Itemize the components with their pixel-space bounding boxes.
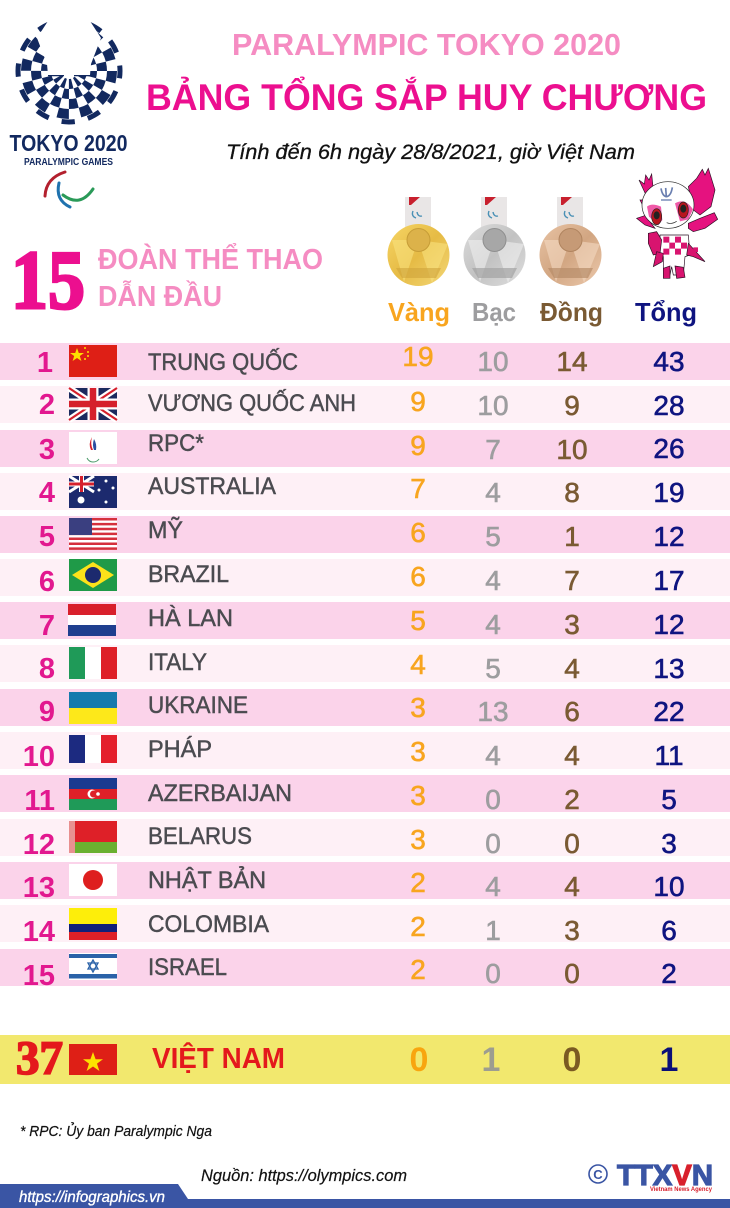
row 4: Australia: 19 bbox=[653, 477, 685, 508]
row 10: Pháp: 3 bbox=[410, 736, 426, 767]
row 13: Nhật Bản bbox=[0, 862, 730, 904]
logo: Tokyo 2020 Paralympic Games bbox=[10, 20, 128, 207]
column headers bbox=[388, 297, 697, 327]
flag: France bbox=[69, 735, 117, 763]
row 3: RPC: 7 bbox=[485, 434, 501, 465]
row 4: Australia: AUSTRALIA bbox=[148, 473, 276, 500]
flag: Brazil bbox=[69, 559, 117, 591]
row 7: Hà Lan: 7 bbox=[39, 610, 55, 642]
subtitle: date note: Tính đến 6h ngày 28/8/2021, giờ Việt Nam bbox=[226, 141, 635, 164]
row 2: Vương quốc Anh: 9 bbox=[564, 390, 580, 421]
header: Vàng: Vàng bbox=[388, 297, 450, 327]
row 9: Ukraine: 9 bbox=[39, 696, 55, 728]
row 8: Italy: 13 bbox=[653, 653, 685, 684]
header: Tổng: Tổng bbox=[635, 297, 697, 327]
row 13: Nhật Bản: 4 bbox=[564, 871, 580, 902]
callout: 15 đoàn thể thao dẫn đầu bbox=[11, 234, 323, 327]
row 10: Pháp: 10 bbox=[23, 741, 55, 773]
row 2: Vương quốc Anh: 10 bbox=[477, 390, 509, 421]
row 6: Brazil: BRAZIL bbox=[148, 561, 229, 588]
flag: United States bbox=[69, 518, 117, 550]
footer bar bbox=[0, 1184, 730, 1208]
row 3: RPC: 9 bbox=[410, 430, 426, 461]
row 6: Brazil: 4 bbox=[485, 565, 501, 596]
values: medals of Vietnam: 0 bbox=[410, 1041, 428, 1079]
flag: Japan bbox=[69, 864, 117, 896]
logo: TTXVN: C bbox=[593, 1167, 603, 1182]
row 5: Mỹ: 1 bbox=[564, 521, 580, 552]
row 1: Trung Quốc: 19 bbox=[402, 341, 434, 372]
row 12: Belarus: BELARUS bbox=[148, 823, 252, 850]
footnote: RPC: * RPC: Ủy ban Paralympic Nga bbox=[20, 1122, 212, 1140]
row 6: Brazil: 7 bbox=[564, 565, 580, 596]
source: Nguồn: https://olympics.com bbox=[201, 1167, 407, 1185]
row 2: Vương quốc Anh: 9 bbox=[410, 386, 426, 417]
row 3: RPC bbox=[0, 430, 730, 467]
row 2: Vương quốc Anh: 28 bbox=[653, 390, 685, 421]
row 6: Brazil: 17 bbox=[653, 565, 685, 596]
row 9: Ukraine: UKRAINE bbox=[148, 692, 248, 719]
row 12: Belarus bbox=[0, 819, 730, 861]
row 7: Hà Lan: HÀ LAN bbox=[148, 605, 233, 632]
row 9: Ukraine: 13 bbox=[477, 696, 509, 727]
row 8: Italy: 4 bbox=[410, 649, 426, 680]
row 11: Azerbaijan bbox=[0, 775, 730, 817]
row 11: Azerbaijan: 3 bbox=[410, 780, 426, 811]
row 4: Australia: 8 bbox=[564, 477, 580, 508]
header: Bạc: Bạc bbox=[472, 297, 516, 327]
row 14: Colombia: 3 bbox=[564, 915, 580, 946]
footer link: https://infographics.vn bbox=[19, 1189, 165, 1206]
flag: Israel bbox=[69, 953, 117, 980]
row 6: Brazil: 6 bbox=[39, 566, 55, 598]
values: medals of Vietnam: 1 bbox=[660, 1041, 678, 1079]
row 13: Nhật Bản: NHẬT BẢN bbox=[148, 865, 266, 894]
row 5: Mỹ: 12 bbox=[653, 521, 685, 552]
callout text line 2: DẪN ĐẦU bbox=[98, 279, 222, 313]
flag: Colombia bbox=[69, 908, 117, 940]
emblem: checkered wreath bbox=[18, 20, 120, 122]
row 7: Hà Lan bbox=[0, 602, 730, 642]
icon: silver medal bbox=[464, 197, 526, 286]
row 1: Trung Quốc: 1 bbox=[37, 347, 53, 379]
row 14: Colombia: COLOMBIA bbox=[148, 911, 269, 938]
flag: China bbox=[69, 345, 117, 377]
row 7: Hà Lan: 3 bbox=[564, 609, 580, 640]
row 4: Australia: 4 bbox=[485, 477, 501, 508]
flag: Australia bbox=[69, 476, 117, 508]
row 8: Italy: ITALY bbox=[148, 649, 207, 676]
row 10: Pháp bbox=[0, 732, 730, 773]
table: medal ranking bbox=[0, 341, 730, 992]
row 15: Israel: 2 bbox=[410, 954, 426, 985]
row 3: RPC: 3 bbox=[39, 434, 55, 466]
row 13: Nhật Bản: 10 bbox=[653, 871, 685, 902]
row 4: Australia: 7 bbox=[410, 473, 426, 504]
row 12: Belarus: 3 bbox=[410, 824, 426, 855]
row 1: Trung Quốc: 10 bbox=[477, 346, 509, 377]
values: medals of Vietnam bbox=[410, 1041, 678, 1079]
flag: Azerbaijan bbox=[69, 778, 117, 810]
row 6: Brazil: 6 bbox=[410, 561, 426, 592]
wordmark: TTXVN bbox=[617, 1160, 713, 1192]
icon: gold medal bbox=[388, 197, 450, 286]
row 3: RPC: RPC* bbox=[148, 430, 204, 457]
row 15: Israel: ISRAEL bbox=[148, 954, 227, 981]
row 1: Trung Quốc: TRUNG QUỐC bbox=[148, 348, 298, 376]
values: medals of Vietnam: 1 bbox=[482, 1041, 500, 1079]
flag: RPC emblem bbox=[69, 432, 117, 464]
row 15: Israel: 2 bbox=[661, 958, 677, 989]
row 11: Azerbaijan: 2 bbox=[564, 784, 580, 815]
header: Đồng: Đồng bbox=[540, 297, 603, 327]
row 5: Mỹ: 5 bbox=[39, 521, 55, 553]
row 9: Ukraine: 22 bbox=[653, 696, 685, 727]
row 2: Vương quốc Anh: 2 bbox=[39, 389, 55, 421]
row 3: RPC: 10 bbox=[556, 434, 588, 465]
row 13: Nhật Bản: 13 bbox=[23, 872, 55, 904]
row 8: Italy: 4 bbox=[564, 653, 580, 684]
copyright mark bbox=[589, 1165, 607, 1183]
logo subtitle: PARALYMPIC GAMES bbox=[24, 156, 113, 168]
row 3: RPC: 26 bbox=[653, 433, 685, 464]
row 2: Vương quốc Anh: VƯƠNG QUỐC ANH bbox=[148, 389, 356, 417]
name: Việt Nam: VIỆT NAM bbox=[152, 1041, 285, 1075]
row 11: Azerbaijan: AZERBAIJAN bbox=[148, 780, 292, 807]
flag: Ukraine bbox=[69, 692, 117, 724]
row 13: Nhật Bản: 4 bbox=[485, 871, 501, 902]
row 5: Mỹ bbox=[0, 516, 730, 553]
icon: agitos bbox=[45, 172, 93, 207]
values: medals of Vietnam: 0 bbox=[563, 1041, 581, 1079]
row 13: Nhật Bản: 2 bbox=[410, 867, 426, 898]
row 14: Colombia: 6 bbox=[661, 915, 677, 946]
row 15: Israel bbox=[0, 949, 730, 992]
row 14: Colombia bbox=[0, 905, 730, 948]
row 15: Israel: 0 bbox=[564, 958, 580, 989]
row 11: Azerbaijan: 11 bbox=[24, 785, 55, 817]
icon: mascot Someity bbox=[637, 168, 718, 278]
row 15: Israel: 15 bbox=[23, 960, 55, 992]
row 12: Belarus: 0 bbox=[485, 828, 501, 859]
row 2: Vương quốc Anh bbox=[0, 386, 730, 423]
row: Việt Nam highlight bbox=[0, 1032, 730, 1085]
title: Paralympic Tokyo 2020: PARALYMPIC TOKYO 2020 bbox=[232, 27, 621, 62]
row 10: Pháp: 4 bbox=[564, 740, 580, 771]
row 8: Italy: 5 bbox=[485, 653, 501, 684]
row 7: Hà Lan: 12 bbox=[653, 609, 685, 640]
row 8: Italy bbox=[0, 645, 730, 685]
row 14: Colombia: 14 bbox=[23, 916, 55, 948]
row 1: Trung Quốc: 43 bbox=[653, 346, 685, 377]
callout text line 1: ĐOÀN THỂ THAO bbox=[98, 242, 323, 276]
icon: bronze medal bbox=[540, 197, 602, 286]
big number 15: 15 bbox=[11, 234, 85, 327]
row 9: Ukraine: 6 bbox=[564, 696, 580, 727]
row 14: Colombia: 2 bbox=[410, 911, 426, 942]
row 12: Belarus: 0 bbox=[564, 828, 580, 859]
flag: Italy bbox=[69, 647, 117, 679]
row 11: Azerbaijan: 0 bbox=[485, 784, 501, 815]
row 10: Pháp: 4 bbox=[485, 740, 501, 771]
row 12: Belarus: 3 bbox=[661, 828, 677, 859]
row 10: Pháp: PHÁP bbox=[148, 736, 212, 763]
flag: United Kingdom bbox=[69, 388, 117, 420]
row 5: Mỹ: MỸ bbox=[148, 517, 183, 544]
logo wordmark: TOKYO 2020 bbox=[10, 130, 128, 156]
row 6: Brazil bbox=[0, 559, 730, 598]
flag: Vietnam bbox=[69, 1044, 117, 1075]
rank 37: 37 bbox=[16, 1032, 63, 1085]
row 9: Ukraine: 3 bbox=[410, 692, 426, 723]
row 5: Mỹ: 5 bbox=[485, 521, 501, 552]
row 12: Belarus: 12 bbox=[23, 829, 55, 861]
agency tagline: Vietnam News Agency bbox=[650, 1186, 712, 1193]
heading: Bảng tổng sắp huy chương: BẢNG TỔNG SẮP HUY CHƯƠNG bbox=[146, 75, 707, 118]
row 5: Mỹ: 6 bbox=[410, 517, 426, 548]
row 7: Hà Lan: 4 bbox=[485, 609, 501, 640]
row 4: Australia: 4 bbox=[39, 477, 55, 509]
row 11: Azerbaijan: 5 bbox=[661, 784, 677, 815]
row 15: Israel: 0 bbox=[485, 958, 501, 989]
row 1: Trung Quốc bbox=[0, 341, 730, 380]
row 4: Australia bbox=[0, 473, 730, 510]
row 8: Italy: 8 bbox=[39, 653, 55, 685]
row 7: Hà Lan: 5 bbox=[410, 605, 426, 636]
logo: TTXVN bbox=[589, 1160, 713, 1193]
row 9: Ukraine bbox=[0, 689, 730, 728]
flag: Netherlands bbox=[68, 604, 116, 636]
row 1: Trung Quốc: 14 bbox=[556, 346, 588, 377]
row 10: Pháp: 11 bbox=[654, 740, 684, 771]
row 14: Colombia: 1 bbox=[485, 915, 501, 946]
flag: Belarus bbox=[69, 821, 117, 853]
